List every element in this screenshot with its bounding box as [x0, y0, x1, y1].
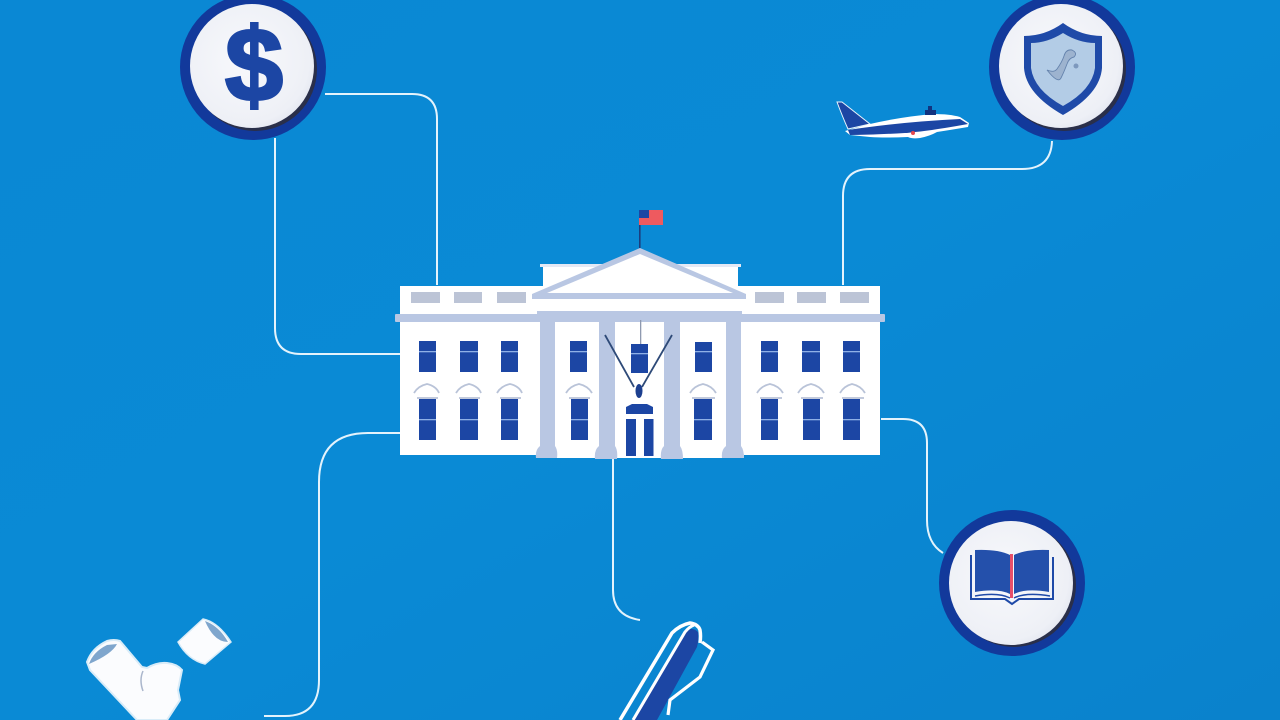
icon: airplane [837, 102, 969, 138]
cornice [395, 314, 885, 322]
icon: dollar badge: $ [225, 8, 283, 124]
icon: broken column [87, 619, 231, 720]
upper block behind pediment [543, 265, 738, 293]
window pediments [414, 384, 865, 398]
icon: book badge [939, 510, 1085, 656]
flag [639, 210, 663, 248]
pediment [532, 248, 746, 299]
window bars [419, 351, 860, 420]
central porch background [537, 312, 744, 458]
door [626, 404, 654, 456]
main body [400, 286, 880, 455]
icon: dollar badge [180, 0, 326, 140]
icon: pen [620, 623, 713, 720]
illustration: White House [395, 210, 885, 459]
icon: shield badge [989, 0, 1135, 140]
connector lines [264, 94, 1052, 716]
lower windows [419, 399, 860, 440]
upper windows [419, 341, 860, 373]
roof panels [411, 292, 869, 303]
lantern and chain [605, 320, 672, 398]
columns [536, 318, 744, 459]
